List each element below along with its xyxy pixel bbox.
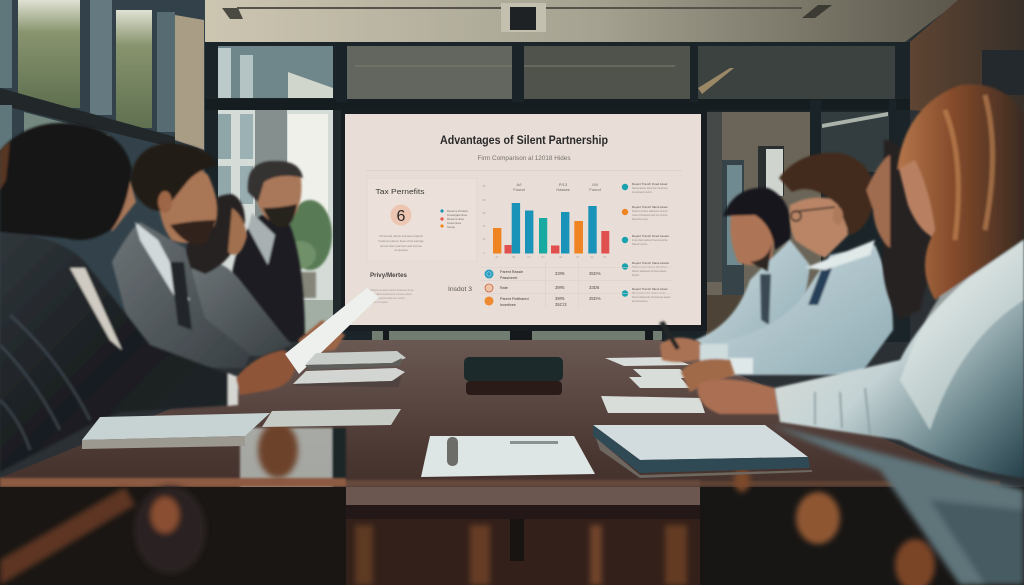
paper with pen <box>421 436 595 477</box>
ceiling projector <box>501 3 546 32</box>
comparison table: 33D6 <box>589 285 600 290</box>
person: woman with grey jacket at back <box>184 194 292 356</box>
panel: key points list: Fixed statements of business assets <box>632 296 671 299</box>
legend <box>440 209 469 229</box>
bar chart: H1 <box>603 256 607 259</box>
hands and pen <box>659 321 735 392</box>
left window wall <box>0 0 205 345</box>
pouch on table <box>464 357 563 395</box>
paper stack 1 <box>305 351 406 370</box>
panel: key points list: Report Tranch Fixed Assets <box>632 234 669 238</box>
person: man with dark suit at back left <box>230 161 305 342</box>
bar chart: 0/II <box>592 182 598 187</box>
lower dark table reflection <box>0 487 1024 585</box>
panel: provisions: lines of partnership tax return <box>370 296 405 300</box>
panel: key points list: Investment returns <box>632 191 653 194</box>
bar chart: 0 <box>483 252 485 255</box>
panel: key points list: Silent partner input from business <box>632 187 668 190</box>
legend: Investigate lines <box>447 213 468 217</box>
comparison table: Parent Rassle <box>500 270 523 274</box>
bar chart: Found <box>513 187 525 192</box>
panel: key points list: Lines of business and net income <box>632 214 668 217</box>
far table strip <box>372 331 662 340</box>
comparison table: Rate <box>500 286 508 290</box>
panel: provisions: Insdot 3 <box>448 287 473 293</box>
legend: Invest lines <box>447 221 462 225</box>
bar chart: D1 <box>541 256 545 259</box>
person: man in light shirt <box>695 188 810 360</box>
back glass wall <box>205 42 910 342</box>
panel: tax benefits: business partner lines of tax savings <box>378 239 424 243</box>
bar chart: G1 <box>590 256 594 259</box>
panel: key points list: Report Tranch Silent Asset <box>632 205 668 209</box>
bar chart: Found <box>589 187 601 192</box>
comparison table: Incertives <box>500 303 516 307</box>
comparison table: 35C/3 <box>555 302 567 307</box>
bar chart: F1 <box>577 256 580 259</box>
plant <box>284 200 332 298</box>
panel: key points list: Report Tranch Fixed Asset <box>632 182 668 186</box>
bar chart: A1 <box>495 256 499 259</box>
panel: tax benefits: 6 <box>397 208 406 225</box>
panel: key points list: Partner income statement returns <box>632 210 668 213</box>
bar chart: 60 <box>483 199 486 202</box>
bar chart: E1 <box>559 256 563 259</box>
panel: key points list: Report <box>632 274 640 277</box>
comparison table: 39#5 <box>555 285 565 290</box>
comparison table: Parent Fintthared <box>500 297 528 301</box>
legend: Reserve Position <box>447 209 469 213</box>
panel: provisions: Citizen services asset business lines <box>370 288 414 292</box>
comparison table <box>480 262 672 308</box>
paper stack 2 <box>293 368 405 387</box>
person: man with grey suit <box>112 143 250 368</box>
wood panel wall <box>910 0 1024 120</box>
bar chart: P/13 <box>559 182 568 187</box>
paper document held <box>285 288 379 374</box>
bar chart: 80 <box>483 185 486 188</box>
bar chart <box>483 182 609 259</box>
person: man with glasses in pale suit <box>700 153 893 375</box>
ceiling <box>150 0 960 42</box>
bar chart: Hasses <box>556 187 570 192</box>
window reflection <box>240 428 346 528</box>
bar chart: 50 <box>483 212 486 215</box>
person: foreground woman in black blazer <box>0 123 295 472</box>
screen stand <box>383 331 653 340</box>
panel: key points list: Records report <box>632 218 648 221</box>
panel: key points list: Report Tranch Silent Asset <box>632 287 668 291</box>
interior room behind glass <box>706 100 896 340</box>
panel: tax benefits: companies <box>394 248 408 252</box>
presentation screen <box>341 109 707 340</box>
panel: key points list: Partner return income silent lines <box>632 266 668 269</box>
panel: key points list: Silent partner line income items <box>632 292 666 295</box>
panel: key points list: Annual returns <box>632 300 648 303</box>
panel: provisions: policy of report <box>370 300 388 304</box>
comparison table: 33#6 <box>555 271 565 276</box>
panel: key points list: Report Tranch Class Assets <box>632 261 670 265</box>
comparison table: 35D% <box>589 296 601 301</box>
bar chart: C1 <box>527 256 531 259</box>
bar chart: 20 <box>483 238 486 241</box>
person: woman with dark hair <box>866 140 931 320</box>
slide subtitle: Firm Comparison al 12018 Hides <box>478 156 570 162</box>
panel: provisions: Privy/Mertes <box>370 272 407 279</box>
legend: Scope <box>447 225 455 229</box>
panel: provisions: Important investment income asset <box>370 292 412 296</box>
panel: key points list <box>622 182 671 303</box>
bar chart: A/I <box>517 182 521 187</box>
panel: key points list: Input silent partner fixed amounts <box>632 239 668 242</box>
notebook left <box>82 413 270 449</box>
legend: Reserve lines <box>447 217 465 221</box>
panel: tax benefits: Tax Pernefits <box>376 187 425 196</box>
binder <box>593 425 812 478</box>
right side papers <box>601 357 705 413</box>
table items left <box>82 351 406 449</box>
document left <box>262 409 401 427</box>
panel: key points list: Return statement of fixed assets <box>632 270 667 273</box>
table edge highlight <box>0 478 1000 487</box>
person: foreground woman with auburn hair <box>698 84 1024 478</box>
panel: tax benefits: Preserved clients business original <box>379 234 423 238</box>
panel: tax benefits <box>367 178 477 261</box>
panel: provisions <box>370 272 473 304</box>
bar chart: 40 <box>483 225 486 228</box>
table <box>0 331 1024 585</box>
comparison table: 39#5 <box>555 296 565 301</box>
hands holding paper <box>298 320 345 354</box>
comparison table: 35D% <box>589 271 601 276</box>
panel: key points list: Stated income <box>632 243 648 246</box>
slide title: Advantages of Silent Partnership <box>440 135 608 147</box>
panel: tax benefits: across silent partners and income <box>380 244 422 248</box>
comparison table: Passiveret <box>500 276 517 280</box>
bar chart: B1 <box>512 256 516 259</box>
person reflections <box>0 422 1024 585</box>
